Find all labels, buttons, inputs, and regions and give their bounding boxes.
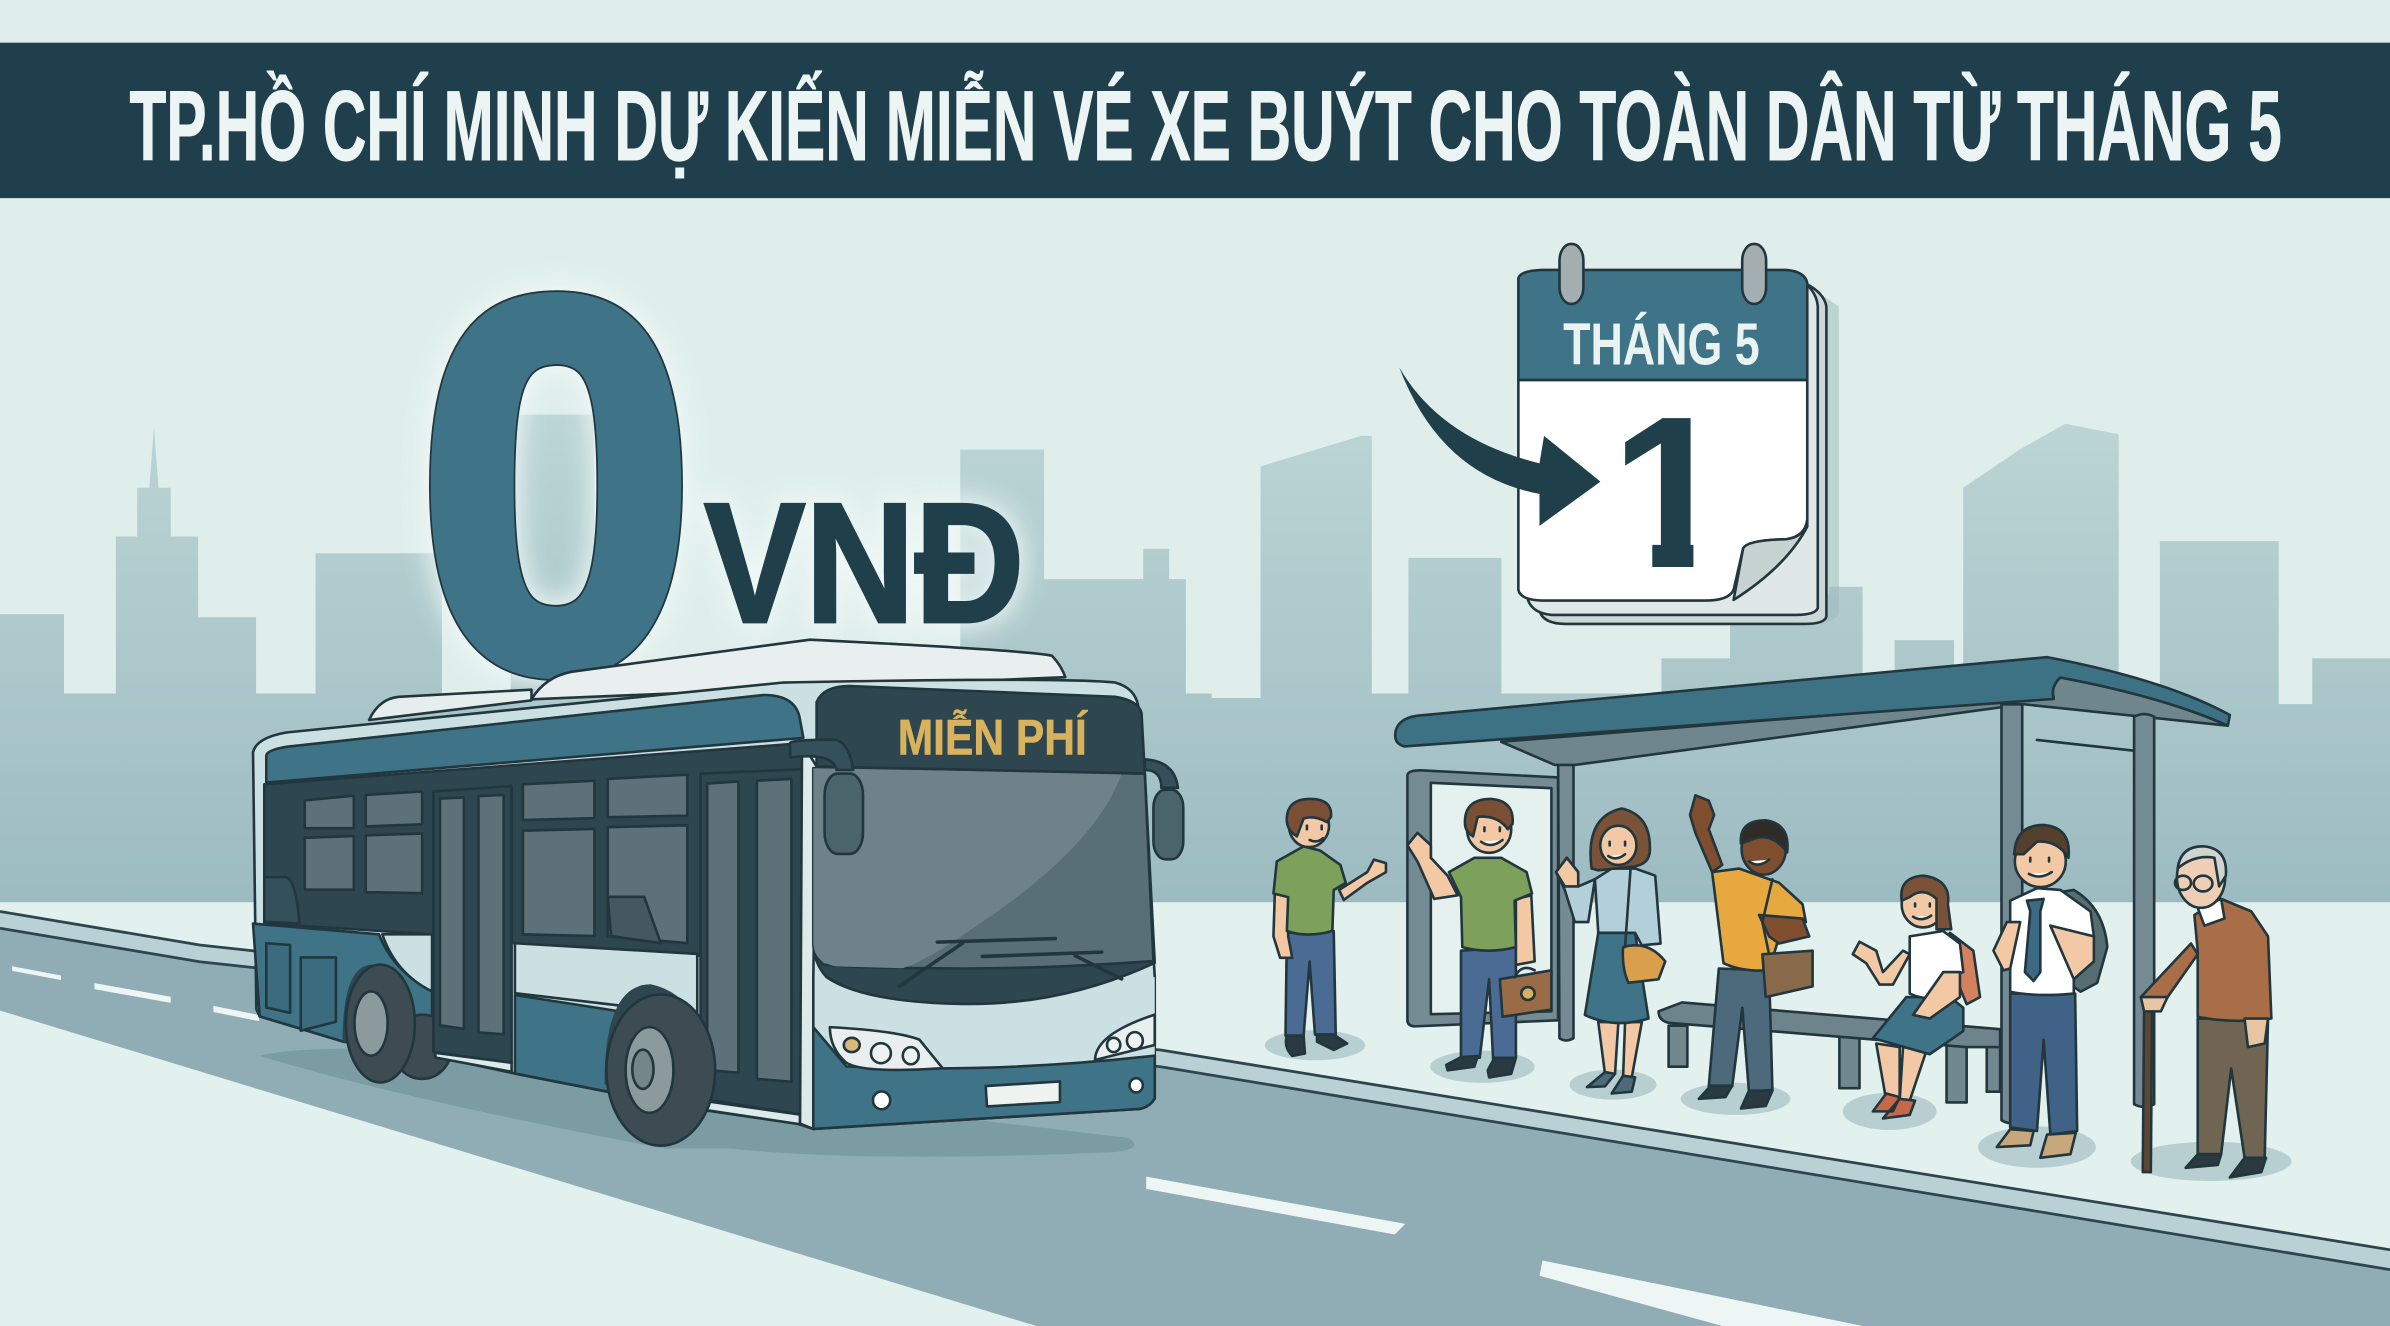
bus sign text: MIỄN PHÍ xyxy=(898,708,1088,765)
rear panel and bench xyxy=(1407,740,2134,1102)
front wheel xyxy=(604,984,697,1109)
day number: 1 xyxy=(1610,371,1731,613)
month label: THÁNG 5 xyxy=(1563,310,1760,377)
person 1 xyxy=(1273,799,1386,1056)
arrow into calendar xyxy=(1399,367,1600,526)
large zero: 0 xyxy=(419,192,694,778)
ground shadows xyxy=(1265,1030,2291,1181)
roof xyxy=(1395,657,2230,765)
front face xyxy=(800,743,817,1129)
shelter and passengers xyxy=(1265,657,2291,1181)
roof units xyxy=(369,690,532,720)
glow behind zero and currency: 0 xyxy=(419,192,694,778)
sidewalk and ground xyxy=(0,902,2390,1326)
person 6 backpack xyxy=(2050,890,2107,992)
headlights xyxy=(830,1027,943,1070)
mirrors xyxy=(790,740,853,770)
calendar xyxy=(1518,244,1839,625)
destination board xyxy=(817,686,1145,774)
windshield xyxy=(813,768,1155,1004)
banner xyxy=(0,43,2390,198)
person 4 xyxy=(1690,795,1813,1109)
window band xyxy=(264,743,802,956)
bus shadow xyxy=(260,1049,1134,1157)
road xyxy=(0,911,2390,1326)
glow behind zero and currency xyxy=(419,192,1024,778)
person 5 xyxy=(1853,876,1980,1119)
glow behind zero and currency: VNĐ xyxy=(704,468,1024,659)
wipers xyxy=(899,939,1122,986)
person 7 xyxy=(2141,846,2271,1177)
front poles xyxy=(2001,704,2154,1123)
lower side panels xyxy=(253,924,432,1056)
person 3 xyxy=(1556,809,1665,1094)
rear wheel xyxy=(343,965,412,1049)
bus xyxy=(253,640,1183,1157)
number plate xyxy=(986,1081,1060,1106)
side doors xyxy=(433,786,512,1063)
person 6 xyxy=(1993,825,2094,1158)
body shell xyxy=(253,680,1155,1129)
large zero: 0 xyxy=(419,192,694,778)
VNĐ label: VNĐ xyxy=(704,468,1024,659)
side windows xyxy=(305,775,687,943)
city skyline xyxy=(0,415,2390,907)
person 2 xyxy=(1407,799,1551,1077)
top panel xyxy=(266,695,803,783)
